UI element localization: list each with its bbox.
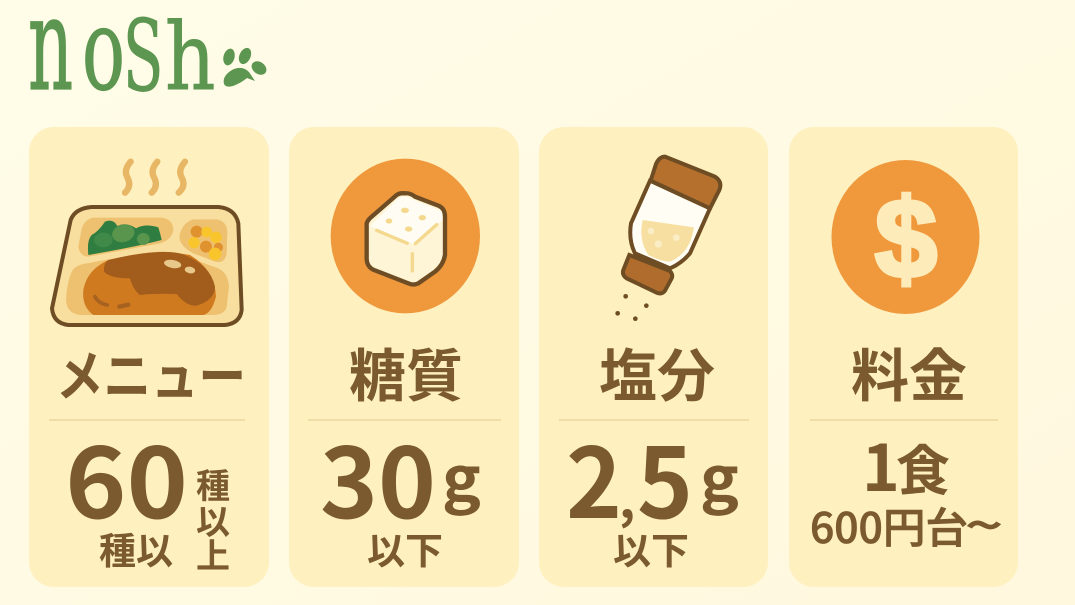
- logo: noSh with paw: h: [165, 4, 215, 112]
- unit: horizontal: 種以: [99, 521, 173, 575]
- heading: menu: メニュー: [56, 332, 246, 412]
- value: 2.5g: ,: [619, 461, 635, 533]
- logo: noSh with paw: S: [123, 0, 163, 114]
- icon: sugar cube: [331, 159, 480, 313]
- panel: price: [789, 127, 1018, 587]
- panel: menu: [29, 127, 269, 587]
- icon: dollar coin: $: [875, 176, 937, 301]
- value: per meal: [862, 418, 950, 510]
- unit: vertical: 以: [196, 495, 230, 544]
- value: 2.5g: 5: [637, 405, 693, 546]
- panel: sugar: [289, 127, 519, 587]
- value: 2.5g: [566, 405, 739, 546]
- icon: paw: [221, 46, 269, 87]
- heading: price: 料金: [851, 331, 967, 413]
- unit: vertical: 種: [196, 459, 230, 508]
- value: per meal: 食: [896, 427, 950, 506]
- logo: noSh with paw: [28, 0, 269, 120]
- unit: vertical: 上: [196, 529, 230, 578]
- unit: below: 以下: [613, 521, 689, 575]
- panel: sugar: g: [442, 429, 481, 519]
- value: 2.5g: 2: [566, 405, 622, 546]
- panel: salt: [539, 127, 768, 587]
- unit: below: 以下: [367, 521, 443, 575]
- value: 30g: 30: [320, 405, 436, 546]
- value: per meal: 1: [862, 418, 900, 510]
- heading: salt: 塩分: [599, 331, 715, 413]
- unit: vertical: [196, 459, 230, 578]
- icon: meal tray with steam: [52, 162, 242, 325]
- icon: dollar coin: [832, 160, 980, 314]
- icon: salt shaker: [615, 157, 720, 321]
- value: price: 600円台: [810, 495, 968, 556]
- value: price: ~: [965, 490, 1003, 556]
- value: 2.5g: g: [700, 429, 739, 519]
- value: 60: 60: [65, 405, 188, 546]
- heading: sugar: 糖質: [349, 331, 463, 413]
